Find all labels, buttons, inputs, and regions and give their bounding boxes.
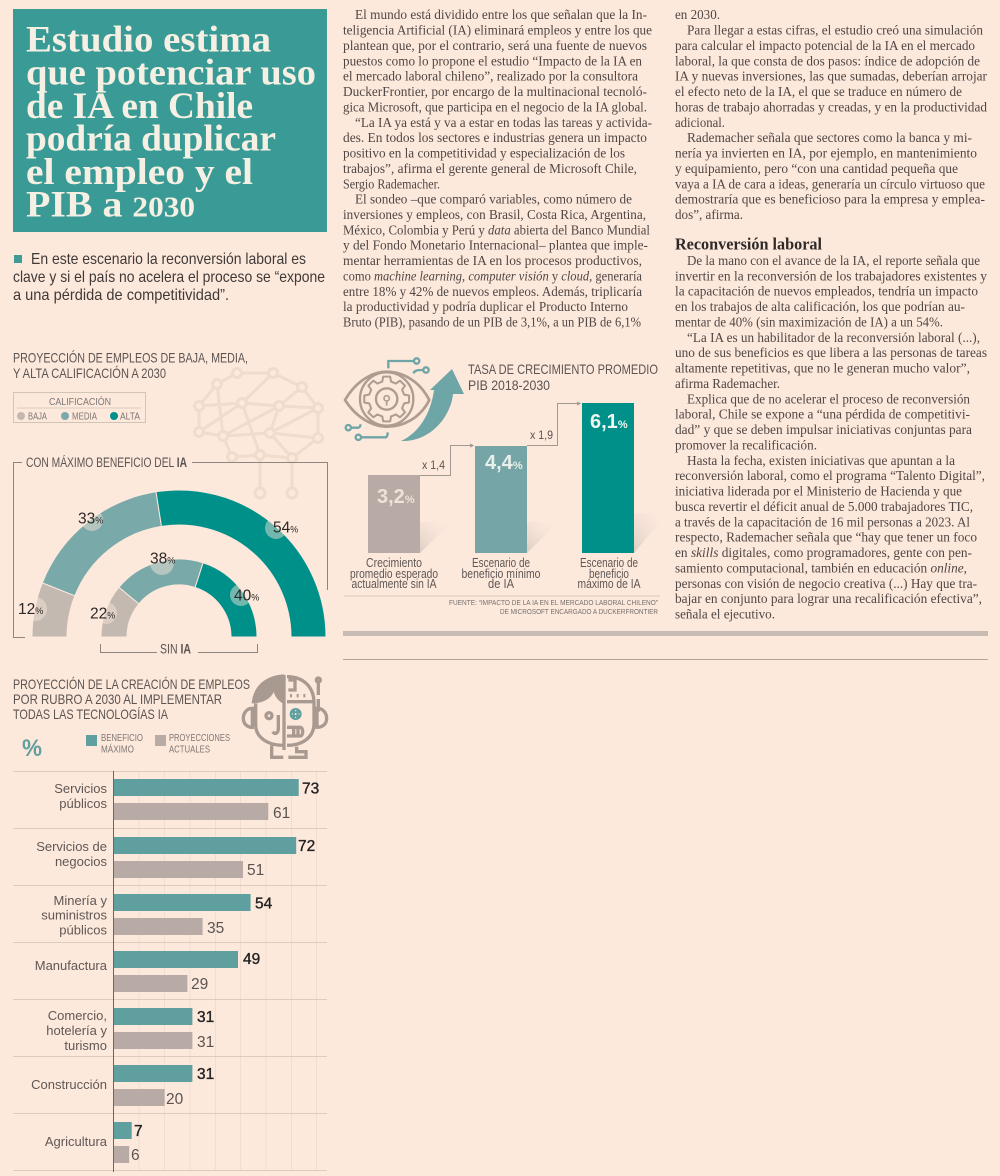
- article column 2 bottom: afirma Rademacher.: [675, 377, 780, 392]
- heading: creación de empleos por rubro: PROYECCIÓN DE LA CREACIÓN DE EMPLEOS: [13, 676, 250, 692]
- row: servicios públicos: públicos: [59, 796, 107, 811]
- heading: creación de empleos por rubro: [13, 676, 250, 722]
- legend: beneficio máximo / proyecciones actuales: BENEFICIO: [101, 732, 143, 744]
- percent labels: 54%: [273, 520, 298, 536]
- article column 2 bottom: respecto, Rademacher señala que “hay que tener un foco: [675, 531, 977, 546]
- article column 1: inversiones y empleos, con Brasil, Costa Rica, Argentina,: [343, 208, 646, 223]
- article column 2 top: [675, 8, 987, 223]
- article column 2 top: IA y nuevas inversiones, las que sumadas, deberían arrojar: [675, 70, 987, 85]
- article column 2 top: vaya a IA de cara a ideas, generaría un círculo virtuoso que: [675, 177, 985, 192]
- article column 2 bottom: a través de la capacitación de 16 mil personas a 2023. Al: [675, 515, 970, 530]
- article column 2 bottom: reconversión laboral, como el programa “Talento Digital”,: [675, 469, 985, 484]
- article column 1: [343, 8, 652, 331]
- article column 2 top: en 2030.: [675, 8, 720, 23]
- article column 2 bottom: laboral, Chile se expone a “una pérdida de competitivi-: [675, 408, 970, 423]
- row: minería y suministros públicos: [41, 893, 273, 938]
- article column 1: Sergio Rademacher.: [343, 177, 440, 192]
- heading: tasa de crecimiento: [468, 362, 658, 393]
- article column 2 bottom: “La IA es un habilitador de la reconversión laboral (...),: [687, 331, 980, 346]
- row: minería y suministros públicos: Minería y: [54, 893, 107, 908]
- source note: FUENTE: “IMPACTO DE LA IA EN EL MERCADO LABORAL CHILENO”: [449, 598, 658, 607]
- article column 2 bottom: personas con visión de negocio creativa (...) Hay que tra-: [675, 577, 977, 592]
- row: servicios públicos: Servicios: [54, 781, 107, 796]
- icon: eye with gear: [345, 358, 429, 440]
- article column 1: la productividad y podría duplicar el Producto Interno: [343, 300, 628, 315]
- heading: creación de empleos por rubro: POR RUBRO A 2030 AL IMPLEMENTAR: [13, 692, 222, 707]
- article column 1: gica Microsoft, que participa en el negocio de la IA global.: [343, 100, 647, 115]
- title panel: podría duplicar: [26, 119, 276, 160]
- article column 2 bottom: en skills digitales, como programadores, gente con pen-: [675, 546, 972, 561]
- article column 2 top: para calcular el impacto potencial de la IA en el mercado: [675, 39, 975, 54]
- heading: creación de empleos por rubro: TODAS LAS TECNOLOGÍAS IA: [13, 706, 169, 722]
- title panel: PIB a 2030: [26, 185, 195, 226]
- article column 2 bottom: mentar de 40% (sin maximización de IA) a un 54%.: [675, 316, 943, 330]
- bar: beneficio mínimo: [475, 446, 527, 553]
- arrow: x 1,9: x 1,9: [530, 430, 553, 442]
- arrow: x 1,9: [527, 402, 580, 446]
- title panel: el empleo y el: [26, 152, 253, 193]
- article column 1: puestos como lo propone el estudio “Impacto de la IA en: [343, 54, 642, 69]
- row: manufactura: 49: [243, 951, 260, 968]
- bar: beneficio máximo: 6,1%: [590, 411, 628, 433]
- bar labels: [350, 556, 641, 591]
- row: construcción: 31: [197, 1066, 214, 1083]
- bar labels: de IA: [488, 577, 515, 591]
- row: comercio, hotelería y turismo: turismo: [64, 1038, 107, 1053]
- subheading: Reconversión laboral: Reconversión laboral: [675, 234, 822, 254]
- icon: brain network: [194, 368, 322, 498]
- row: construcción: [31, 1065, 214, 1108]
- chart: semicírculo sin IA: [101, 559, 257, 637]
- row: minería y suministros públicos: suministros: [41, 908, 107, 922]
- article column 2 top: demostraría que es beneficioso para la empresa y emplea-: [675, 193, 985, 208]
- article column 1: como machine learning, computer visión y cloud, generaría: [343, 270, 643, 284]
- article column 2 top: Rademacher señala que sectores como la banca y mi-: [687, 131, 972, 146]
- article column 2 top: nería ya invierten en IA, por ejemplo, en mantenimiento: [675, 146, 977, 162]
- article column 2 bottom: samiento computacional, también en educación online,: [675, 561, 967, 576]
- article column 2 top: Para llegar a estas cifras, el estudio creó una simulación: [687, 24, 983, 39]
- bracket: con máximo beneficio del IA: [14, 455, 328, 638]
- article column 2 bottom: invertir en la reconversión de los trabajadores existentes y: [675, 269, 987, 284]
- row: minería y suministros públicos: 54: [255, 896, 273, 912]
- bar labels: Crecimiento: [366, 556, 422, 570]
- legend: beneficio máximo / proyecciones actuales: ACTUALES: [169, 744, 210, 756]
- article column 2 top: dos”, afirma.: [675, 208, 743, 223]
- source note: [344, 596, 660, 616]
- row: servicios de negocios: 51: [247, 862, 264, 879]
- row: manufactura: [35, 951, 260, 993]
- percent labels: [18, 510, 298, 622]
- percent labels: 33%: [78, 510, 103, 528]
- article column 1: entre 18% y 42% de nuevos empleos. Además, triplicaría: [343, 285, 643, 300]
- article column 1: des. En todos los sectores e industrias genera un impacto: [343, 131, 647, 146]
- bar shadows: [420, 513, 667, 553]
- row: manufactura: Manufactura: [35, 958, 108, 973]
- article column 1: trabajos”, afirma el gerente general de Microsoft Chile,: [343, 162, 637, 177]
- article column 1: El mundo está dividido entre los que señalan que la In-: [355, 8, 647, 23]
- title panel: Estudio estima: [26, 20, 271, 61]
- row: agricultura: 7: [134, 1123, 143, 1140]
- deck text: [13, 251, 325, 304]
- article column 2 bottom: en los trabajos de alta calificación, los que podrían au-: [675, 300, 965, 315]
- percent labels: 12%: [18, 601, 43, 618]
- article column 2 bottom: promover la recalificación.: [675, 438, 817, 453]
- article column 1: “La IA ya está y va a estar en todas las tareas y activida-: [355, 116, 652, 131]
- arrow: x 1,4: x 1,4: [422, 460, 446, 472]
- row: construcción: 20: [166, 1091, 184, 1108]
- article column 2 top: adicional.: [675, 116, 725, 131]
- icon: growth arrow: [401, 369, 464, 441]
- bar labels: máximo de IA: [578, 577, 641, 591]
- heading: tasa de crecimiento: PIB 2018-2030: [468, 378, 550, 393]
- bar labels: promedio esperado: [350, 567, 438, 581]
- bar: beneficio mínimo: 4,4%: [485, 452, 523, 474]
- row: agricultura: [45, 1122, 143, 1164]
- legend: beneficio máximo / proyecciones actuales: PROYECCIONES: [169, 732, 230, 744]
- row: agricultura: 6: [131, 1147, 140, 1164]
- bar labels: Escenario de: [472, 556, 530, 570]
- article column 2 bottom: Explica que de no acelerar el proceso de reconversión: [687, 392, 970, 407]
- heading: proyección de empleos: [13, 350, 248, 381]
- article column 2 bottom: busca revertir el déficit anual de 5.000 trabajadores TIC,: [675, 500, 973, 515]
- bar chart grid: [13, 771, 327, 1170]
- bar labels: actualmente sin IA: [352, 577, 437, 591]
- title panel: de IA en Chile: [26, 86, 253, 127]
- bar labels: beneficio mínimo: [462, 567, 541, 581]
- legend: beneficio máximo / proyecciones actuales: MÁXIMO: [101, 742, 134, 756]
- row: minería y suministros públicos: 35: [207, 920, 224, 937]
- bracket: sin IA: SIN IA: [160, 642, 191, 656]
- title panel: que potenciar uso: [26, 52, 316, 94]
- deck text: a una pérdida de competitividad”.: [13, 287, 229, 304]
- source note: DE MICROSOFT ENCARGADO A DUCKERFRONTIER: [500, 607, 658, 616]
- chart: semicírculo con máximo beneficio: [32, 490, 326, 637]
- article column 1: el mercado laboral chileno”, realizado por la consultora: [343, 70, 639, 85]
- article column 2 top: el efecto neto de la IA, el que se traduce en número de: [675, 85, 962, 100]
- percent labels: 22%: [90, 606, 115, 622]
- bar chart: rows: [31, 779, 319, 1164]
- row: minería y suministros públicos: públicos: [59, 922, 107, 938]
- row: servicios de negocios: negocios: [55, 854, 107, 869]
- article column 2 bottom: dad” y que se deben impulsar iniciativas conjuntas para: [675, 423, 973, 438]
- article column 2 bottom: bajar en conjunto para lograr una recalificación efectiva”,: [675, 592, 982, 607]
- article column 2 top: y equipamiento, pero “con una cantidad pequeña que: [675, 162, 958, 177]
- legend: beneficio máximo / proyecciones actuales: [86, 732, 230, 756]
- article column 1: El sondeo –que comparó variables, como número de: [355, 193, 632, 208]
- article column 1: plantean que, por el contrario, será una fuente de nuevos: [343, 39, 647, 54]
- row: servicios públicos: 73: [302, 780, 319, 798]
- article column 2 bottom: [675, 254, 987, 622]
- label markers on rings: [23, 509, 287, 624]
- row: servicios de negocios: [36, 837, 315, 879]
- heading: proyección de empleos: PROYECCIÓN DE EMPLEOS DE BAJA, MEDIA,: [13, 350, 248, 366]
- deck text: clave y si el país no acelera el proceso se “expone: [13, 269, 325, 286]
- row: servicios públicos: [54, 779, 319, 822]
- bracket: con máximo beneficio del IA: CON MÁXIMO BENEFICIO DEL IA: [26, 455, 187, 470]
- row: comercio, hotelería y turismo: 31: [197, 1034, 214, 1051]
- legend: calificación: [14, 392, 146, 422]
- article column 2 bottom: Hasta la fecha, existen iniciativas que apuntan a la: [687, 454, 956, 469]
- percent labels: 40%: [234, 588, 259, 604]
- bar labels: beneficio: [589, 567, 629, 581]
- article column 2 top: horas de trabajo ahorradas y creadas, y en la productividad: [675, 100, 987, 115]
- bar chart axis: [112, 771, 114, 1172]
- article column 1: DuckerFrontier, por encargo de la multinacional tecnoló-: [343, 85, 647, 100]
- bracket: sin IA: [100, 642, 258, 656]
- row: comercio, hotelería y turismo: hotelería y: [46, 1023, 107, 1038]
- bar: crecimiento sin IA: [368, 475, 420, 553]
- row: manufactura: 29: [191, 976, 208, 993]
- legend: calificación: BAJA: [28, 412, 47, 422]
- heading: proyección de empleos: Y ALTA CALIFICACIÓN A 2030: [13, 365, 166, 381]
- row: comercio, hotelería y turismo: 31: [197, 1009, 214, 1026]
- deck text: En este escenario la reconversión laboral es: [31, 251, 306, 268]
- row: servicios de negocios: Servicios de: [36, 839, 107, 854]
- article column 1: y del Fondo Monetario Internacional– plantea que imple-: [343, 239, 648, 254]
- article column 2 bottom: la capacitación de nuevos empleados, tendría un impacto: [675, 285, 978, 300]
- article column 2 bottom: altamente repetitivas, que no le generan mucho valor”,: [675, 362, 970, 377]
- legend: calificación: ALTA: [120, 412, 140, 422]
- legend: calificación: MEDIA: [72, 412, 97, 422]
- article column 2 bottom: uno de sus beneficios es que libera a las personas de tareas: [675, 346, 987, 361]
- arrow: x 1,4: [420, 444, 473, 476]
- bar labels: Escenario de: [580, 556, 638, 570]
- article column 2 bottom: iniciativa liderada por el Ministerio de Hacienda y que: [675, 485, 962, 500]
- title panel: [13, 9, 327, 232]
- article column 1: positivo en la competitividad y especialización de los: [343, 146, 625, 162]
- row: agricultura: Agricultura: [45, 1134, 108, 1149]
- heading: tasa de crecimiento: TASA DE CRECIMIENTO PROMEDIO: [468, 362, 658, 377]
- row: servicios públicos: 61: [273, 805, 290, 822]
- legend: calificación: CALIFICACIÓN: [49, 395, 111, 408]
- row: comercio, hotelería y turismo: [46, 1008, 214, 1053]
- row: servicios de negocios: 72: [298, 838, 315, 855]
- bar: crecimiento sin IA: 3,2%: [377, 486, 415, 508]
- percent symbol: %: [22, 735, 42, 762]
- bar: beneficio máximo: [582, 403, 634, 553]
- article column 1: mentar herramientas de IA en los procesos productivos,: [343, 254, 642, 269]
- article column 1: Bruto (PIB), pasando de un PIB de 3,1%, a un PIB de 6,1%: [343, 316, 641, 331]
- article column 2 bottom: señala el ejecutivo.: [675, 608, 775, 622]
- article column 1: México, Colombia y Perú y data abierta del Banco Mundial: [343, 223, 650, 238]
- percent labels: 38%: [150, 550, 175, 568]
- row: comercio, hotelería y turismo: Comercio,: [48, 1008, 107, 1023]
- article column 2 top: laboral, la que consta de dos pasos: índice de adopción de: [675, 54, 980, 69]
- icon: half human half robot face: [243, 674, 327, 757]
- article column 1: teligencia Artificial (IA) eliminará empleos y entre los que: [343, 24, 652, 39]
- article column 2 bottom: De la mano con el avance de la IA, el reporte señala que: [687, 254, 980, 269]
- row: construcción: Construcción: [31, 1077, 107, 1092]
